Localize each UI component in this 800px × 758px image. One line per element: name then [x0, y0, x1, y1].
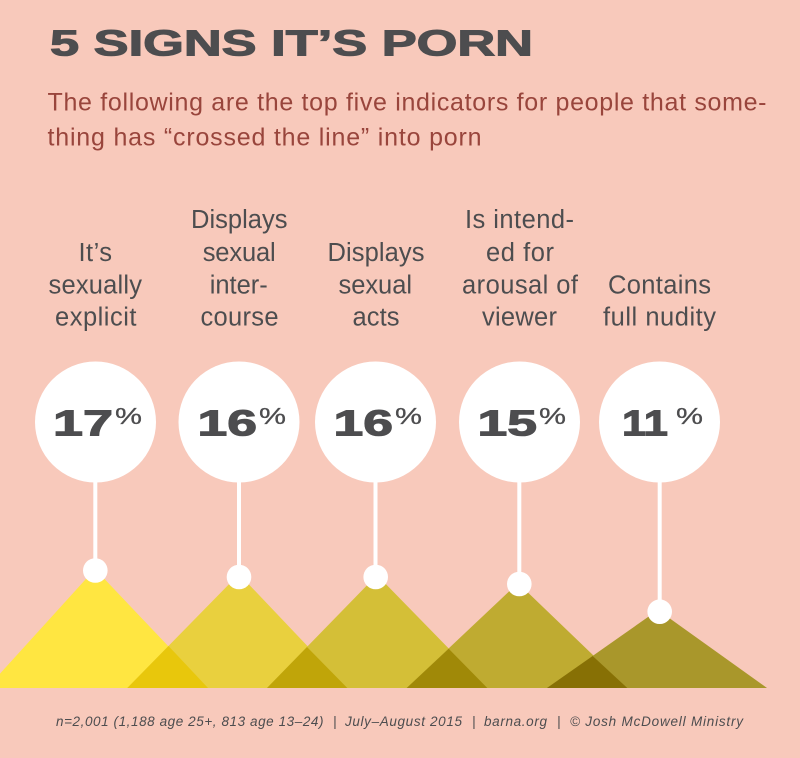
value: % [395, 403, 422, 429]
footer source note: | [333, 714, 337, 729]
label: course [200, 304, 278, 332]
column 4: arousal of viewer 15% [459, 206, 580, 596]
label [603, 272, 716, 332]
label: arousal of [462, 272, 579, 300]
stem [237, 480, 241, 577]
marker dot [83, 558, 108, 583]
triangle 1 [0, 569, 208, 688]
value [198, 402, 286, 444]
circle [459, 362, 580, 482]
value: 11 [622, 402, 668, 444]
footer source note: | [472, 714, 476, 729]
stem [658, 480, 662, 611]
label: Contains [608, 272, 711, 300]
footer source note: © Josh McDowell Ministry [570, 714, 744, 729]
value: 16 [334, 402, 393, 444]
label [462, 206, 579, 332]
label: acts [352, 304, 400, 332]
value: % [115, 403, 142, 429]
label: full nudity [603, 304, 716, 332]
circle [35, 362, 156, 482]
footer source note: barna.org [484, 714, 547, 729]
value: % [539, 403, 566, 429]
label [191, 206, 288, 332]
stem [93, 480, 97, 570]
label: It’s [78, 239, 112, 267]
value: 15 [478, 402, 537, 444]
subtitle text block: thing has “crossed the line” into porn [48, 124, 482, 152]
subtitle text block [48, 88, 766, 152]
column 3: sexual acts 16% [315, 239, 436, 589]
value [622, 402, 703, 444]
column 2: sexual intercourse 16% [178, 206, 300, 589]
marker dot [507, 572, 532, 596]
value [478, 402, 566, 444]
footer source note [56, 714, 744, 729]
value [334, 402, 422, 444]
label: Displays [191, 206, 288, 234]
overlap 2-3 [267, 647, 347, 688]
label: sexual [338, 272, 412, 300]
value [53, 402, 142, 444]
label: inter- [210, 272, 268, 300]
triangle 5 [547, 610, 767, 688]
value: 16 [198, 402, 257, 444]
stem [374, 480, 378, 577]
circle [599, 362, 720, 482]
footer source note: July–August 2015 [344, 714, 462, 729]
footer source note: n=2,001 (1,188 age 25+, 813 age 13–24) [56, 714, 324, 729]
marker dot [227, 565, 251, 589]
stem [517, 480, 521, 584]
label: Displays [328, 239, 424, 267]
subtitle text block: The following are the top five indicators for people that some- [48, 88, 766, 116]
triangle 4 [407, 583, 627, 688]
value: % [676, 403, 703, 429]
value: 17 [53, 402, 113, 444]
label: ed for [486, 239, 554, 267]
marker dot [363, 565, 388, 589]
overlap 1-2 [127, 646, 208, 688]
column 5: full nudity 11% [599, 272, 720, 624]
circle [315, 362, 436, 482]
triangle 2 [127, 574, 347, 688]
mountain chart: overlapping triangles [0, 569, 767, 688]
overlap 3-4 [407, 649, 487, 688]
column 1: sexually explicit 17% [35, 239, 156, 583]
label: sexual [203, 239, 276, 267]
label: explicit [55, 304, 136, 332]
label: viewer [482, 304, 558, 332]
marker dot [647, 599, 672, 624]
circle [178, 362, 300, 482]
triangle 3 [267, 575, 487, 688]
value: % [259, 403, 286, 429]
overlap 4-5 [547, 656, 627, 688]
footer source note: | [557, 714, 561, 729]
label [48, 239, 142, 332]
label [328, 239, 424, 332]
label: sexually [48, 272, 142, 300]
title: 5 SIGNS IT’S PORN [50, 22, 533, 64]
label: Is intend- [465, 206, 574, 234]
